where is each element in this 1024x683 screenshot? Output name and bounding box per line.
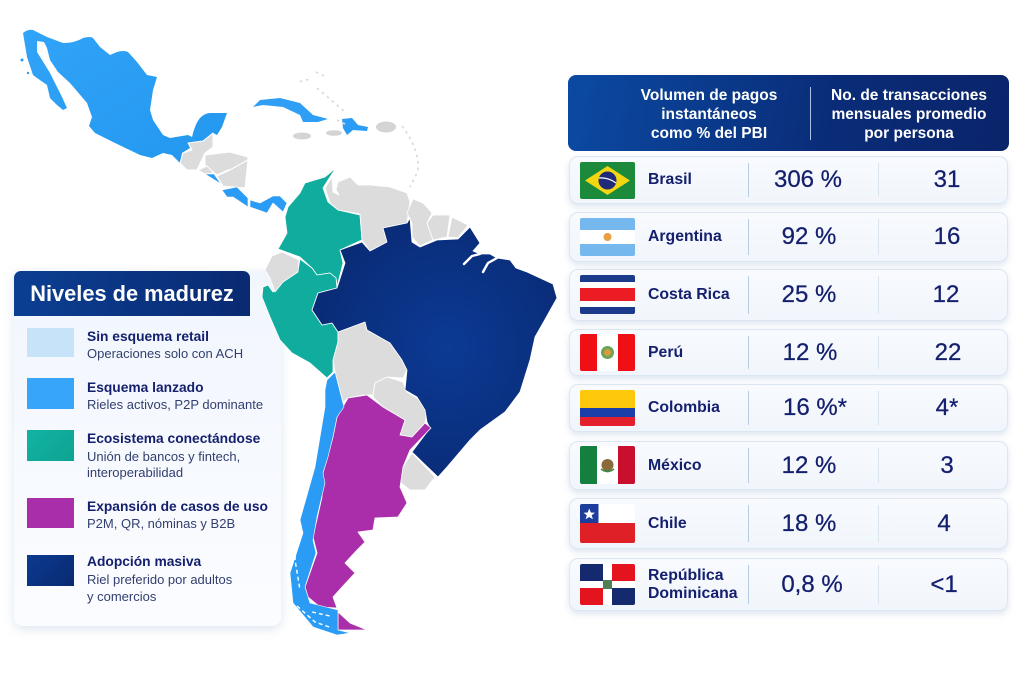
label: esquema lanzado: Rieles activos, P2P dominante: [87, 397, 263, 412]
label: sin esquema retail: [87, 329, 243, 361]
flag: Colombia: [580, 390, 635, 426]
label: adopcion masiva: Riel preferido por adultos: [87, 572, 232, 587]
legend panel: [14, 271, 281, 626]
Caribbean: [253, 72, 418, 187]
row: Costa Rica: Costa Rica: [648, 286, 730, 303]
header: volumen de pagos: como % del PBI: [651, 125, 767, 142]
row: Republica Dominicana: [569, 558, 1008, 611]
row: Argentina: 92 %: [782, 223, 836, 250]
row: Argentina: Argentina: [648, 228, 722, 245]
flag: Brasil: [580, 162, 635, 199]
row: Republica Dominicana: Dominicana: [648, 584, 738, 602]
Ecuador: [265, 252, 299, 292]
label: adopcion masiva: [87, 554, 232, 604]
row: Brasil: 31: [934, 166, 960, 193]
Brazil: [312, 218, 557, 477]
row: Chile: 4: [937, 510, 951, 536]
flag: Mexico: [580, 446, 635, 484]
row: Costa Rica: 12: [933, 281, 959, 308]
label: ecosistema conectandose: Ecosistema conectándose: [87, 431, 260, 446]
label: adopcion masiva: y comercios: [87, 589, 156, 604]
label: expansion de casos de uso: [87, 499, 268, 531]
label: ecosistema conectandose: interoperabilidad: [87, 465, 183, 480]
swatch: ecosistema conectandose: [27, 430, 74, 461]
row: Mexico: 12 %: [782, 452, 836, 478]
row: Peru: 12 %: [783, 338, 837, 366]
row: Republica Dominicana: <1: [930, 570, 958, 598]
row: Colombia: Colombia: [648, 399, 720, 416]
swatch: adopcion masiva: [27, 555, 74, 586]
Central America grey countries: [180, 133, 248, 188]
row: Colombia: 4*: [936, 394, 958, 421]
Chile: [290, 372, 350, 635]
row: Brasil: 306 %: [774, 166, 842, 193]
row: Costa Rica: [569, 269, 1008, 321]
Colombia: [278, 168, 362, 287]
Bolivia, Paraguay, Uruguay: [333, 322, 435, 490]
row: Brasil: [569, 156, 1008, 204]
Amazon delta: [464, 254, 497, 272]
swatch: sin esquema retail: [27, 328, 74, 357]
row: Republica Dominicana: República: [648, 566, 724, 584]
label: esquema lanzado: Esquema lanzado: [87, 380, 204, 395]
row: Chile: Chile: [648, 514, 687, 532]
row: Republica Dominicana: 0,8 %: [781, 570, 843, 598]
table header: [568, 75, 1009, 151]
flag: Republica Dominicana: [580, 564, 635, 605]
row: Argentina: 16: [934, 223, 960, 250]
label: expansion de casos de uso: Expansión de casos de uso: [87, 499, 268, 514]
header: numero de transacciones: No. de transacciones: [831, 87, 987, 104]
row: Chile: [569, 498, 1008, 549]
swatch: expansion de casos de uso: [27, 498, 74, 528]
header: numero de transacciones: por persona: [864, 125, 954, 142]
row: Peru: [569, 329, 1008, 376]
header: volumen de pagos: [640, 87, 777, 142]
legend heading: [14, 271, 250, 316]
header: volumen de pagos: instantáneos: [661, 106, 757, 123]
row: Brasil: Brasil: [648, 171, 692, 188]
label: ecosistema conectandose: Unión de bancos y fintech,: [87, 449, 240, 464]
row: Peru: Perú: [648, 344, 683, 360]
Peru: [262, 259, 338, 378]
row: Chile: 18 %: [782, 510, 836, 536]
label: esquema lanzado: [87, 380, 263, 412]
header: numero de transacciones: mensuales promedio: [831, 106, 987, 123]
row: Peru: 22: [935, 338, 961, 366]
label: adopcion masiva: Adopción masiva: [87, 554, 201, 569]
row: Mexico: 3: [940, 452, 954, 478]
Argentina: [305, 395, 431, 630]
map of Latin America: [20, 30, 557, 635]
Venezuela and Guianas: [325, 177, 468, 251]
row: Costa Rica: 25 %: [782, 281, 836, 308]
flag: Argentina: [580, 218, 635, 256]
label: ecosistema conectandose: [87, 431, 260, 480]
legend heading: Niveles de madurez: [30, 281, 234, 306]
header: volumen de pagos: Volumen de pagos: [641, 87, 777, 104]
flag: Chile: [580, 504, 635, 543]
row: Mexico: [569, 441, 1008, 490]
label: sin esquema retail: Sin esquema retail: [87, 329, 209, 344]
flag: Costa Rica: [580, 275, 635, 314]
header: numero de transacciones: [831, 87, 987, 142]
row: Colombia: 16 %*: [783, 394, 847, 421]
label: sin esquema retail: Operaciones solo con ACH: [87, 346, 243, 361]
swatch: esquema lanzado: [27, 378, 74, 409]
row: Mexico: México: [648, 456, 702, 474]
flag: Peru: [580, 334, 635, 371]
row: Argentina: [569, 212, 1008, 262]
label: expansion de casos de uso: P2M, QR, nóminas y B2B: [87, 516, 235, 531]
Central America blue countries: [205, 174, 287, 213]
Mexico: [20, 30, 227, 163]
row: Colombia: [569, 384, 1008, 432]
